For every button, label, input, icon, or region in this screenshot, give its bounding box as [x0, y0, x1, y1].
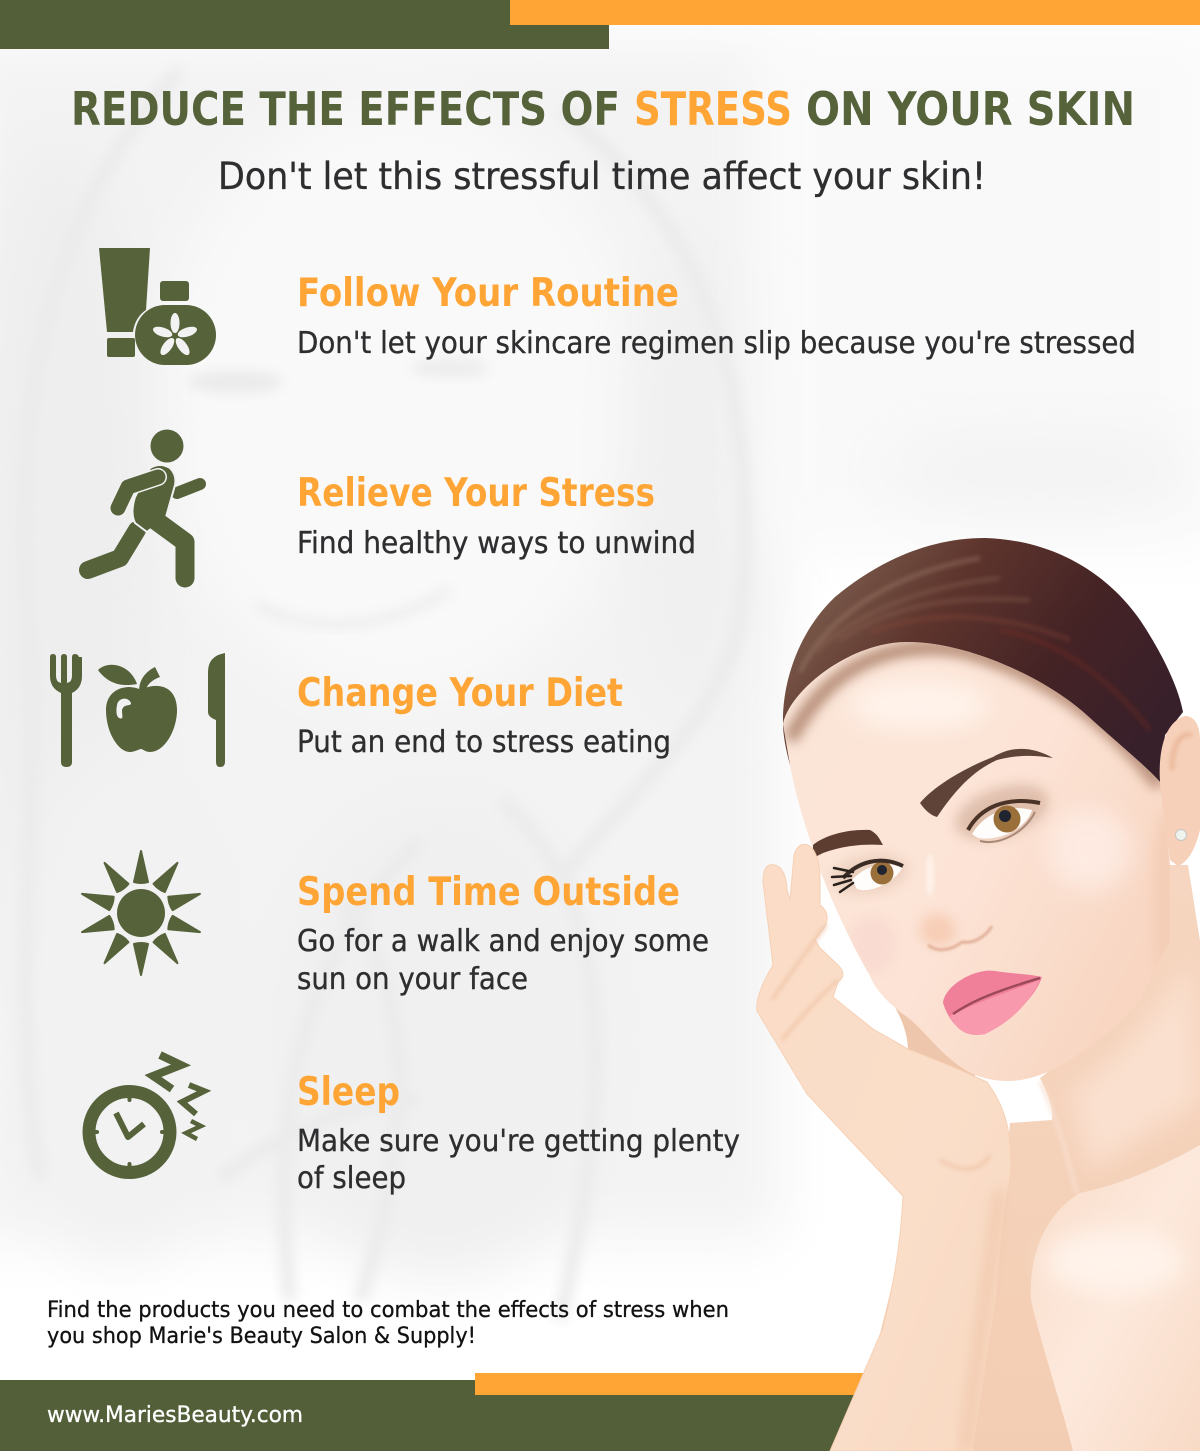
title: REDUCE THE EFFECTS OF	[71, 82, 620, 136]
title: STRESS	[634, 82, 792, 136]
top orange bar	[510, 0, 1200, 25]
heading: change your diet: Change Your Diet	[297, 671, 623, 716]
earring	[1176, 830, 1186, 840]
arm shading	[965, 1190, 1000, 1451]
inner ear	[1172, 735, 1192, 770]
face shading	[790, 648, 1177, 990]
icon: clock with zzz	[89, 1055, 204, 1172]
neck shading	[1070, 960, 1200, 1170]
top green bar	[0, 0, 609, 49]
call to action line 2: you shop Marie's Beauty Salon & Supply!	[47, 1323, 476, 1349]
icon: runner	[88, 430, 200, 578]
icon: fork, apple and knife	[50, 653, 225, 767]
heading: follow your routine: Follow Your Routine	[297, 271, 679, 316]
right eyebrow	[920, 749, 1053, 817]
text: change your diet: Put an end to stress eating	[297, 725, 671, 760]
icon: sun	[80, 851, 202, 975]
text: spend time outside: Go for a walk and enjoy some	[297, 924, 709, 959]
hand and arm	[757, 844, 1011, 1451]
text: sleep: Make sure you're getting plenty	[297, 1124, 740, 1159]
left eyebrow	[813, 830, 883, 858]
heading: relieve your stress: Relieve Your Stress	[297, 471, 655, 516]
lips	[943, 971, 1042, 1035]
text: follow your routine: Don't let your skincare regimen slip because you're stressed	[297, 326, 1136, 361]
heading: sleep: Sleep	[297, 1070, 400, 1115]
shoulder highlight	[1045, 1230, 1185, 1294]
photo: woman with hand on face	[757, 538, 1200, 1451]
right eye	[968, 801, 1040, 842]
title: ON YOUR SKIN	[806, 82, 1135, 136]
nose	[928, 926, 992, 950]
face	[783, 642, 1170, 1081]
subtitle: Don't let this stressful time affect your skin!	[218, 155, 986, 198]
icon: skincare products	[99, 248, 216, 365]
title	[71, 82, 1135, 136]
hair strands	[800, 558, 1150, 730]
foreground shoulder	[1031, 1145, 1200, 1451]
text: relieve your stress: Find healthy ways to unwind	[297, 526, 696, 561]
call to action line 1: Find the products you need to combat the effects of stress when	[47, 1297, 729, 1323]
body and neck	[830, 865, 1200, 1451]
heading: spend time outside: Spend Time Outside	[297, 870, 680, 915]
left eye	[832, 861, 903, 892]
text: sleep, second line: of sleep	[297, 1161, 406, 1196]
hand shading	[772, 925, 990, 1169]
palm behind jaw	[868, 972, 975, 1085]
website url: www.MariesBeauty.com	[47, 1402, 303, 1428]
text: spend time outside, second line: sun on your face	[297, 962, 528, 997]
neck crease	[1040, 1082, 1077, 1193]
hair	[783, 538, 1183, 782]
bottom green bar	[0, 1380, 880, 1451]
ear	[1160, 716, 1200, 866]
bottom orange bar	[475, 1373, 875, 1395]
